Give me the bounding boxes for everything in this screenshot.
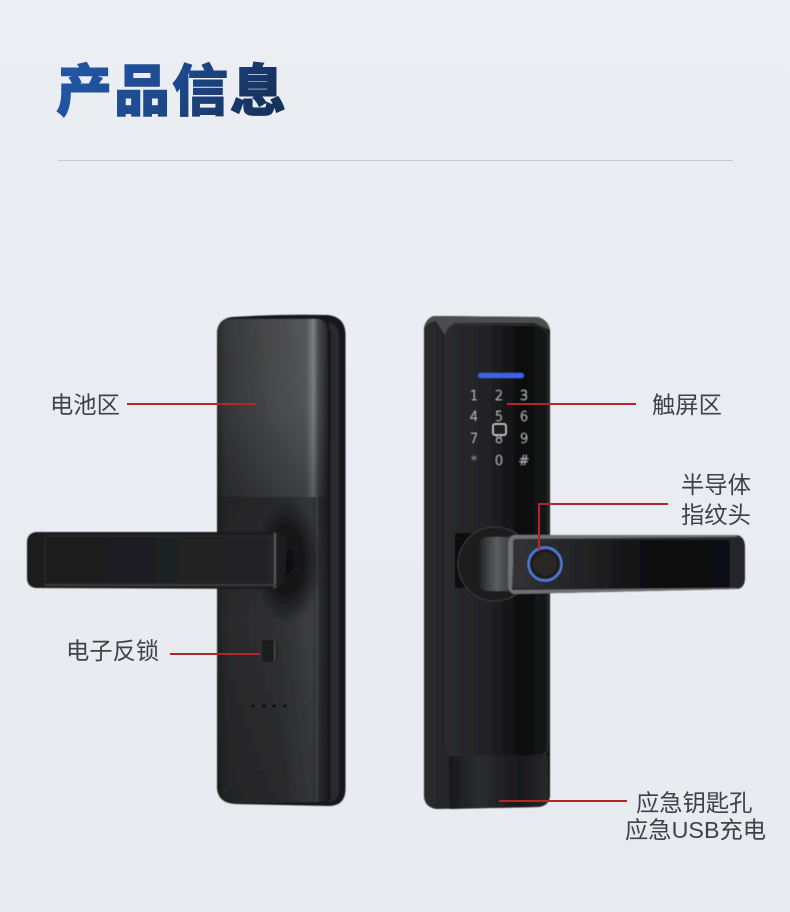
callout: fingerprint: 半导体: [681, 472, 751, 498]
callout: reverse lock: 电子反锁: [66, 638, 159, 664]
callout: emergency key and USB: 应急USB充电: [625, 817, 766, 843]
keypad: #: [519, 454, 529, 469]
title: 产品信息: [56, 47, 288, 128]
keypad: 5: [495, 410, 503, 425]
keypad: [470, 389, 529, 469]
thumb-turn slot: [262, 640, 277, 662]
callout: fingerprint: 指纹头: [681, 502, 751, 528]
callout: touch screen: 触屏区: [652, 392, 722, 418]
keypad: 8: [495, 432, 503, 447]
keypad: *: [471, 454, 477, 469]
callout: emergency key and USB: [499, 790, 766, 843]
knob: [479, 537, 519, 591]
fingerprint reader: [528, 548, 562, 580]
speaker dots: [252, 704, 286, 708]
lower plate: [217, 497, 328, 803]
keypad: 6: [520, 410, 528, 425]
keypad: 3: [520, 389, 528, 404]
keypad: 7: [470, 432, 478, 447]
card reader icon: [493, 424, 506, 435]
back plate body: [217, 315, 346, 806]
keypad: 2: [495, 389, 503, 404]
left lock: back view: [27, 315, 346, 806]
keypad: 4: [470, 410, 478, 425]
handle shadow: [254, 500, 322, 624]
keypad: 1: [470, 389, 478, 404]
keypad: 9: [520, 432, 528, 447]
keypad: 0: [495, 454, 503, 469]
callout: emergency key and USB: 应急钥匙孔: [636, 790, 752, 816]
battery compartment: [217, 319, 328, 497]
indicator light: [478, 373, 524, 378]
lever backplate: [455, 533, 513, 588]
callout: fingerprint: [539, 472, 751, 551]
right lock: front view: [424, 316, 745, 809]
callout: battery: 电池区: [50, 392, 120, 418]
knob collar: [458, 527, 532, 601]
outer frame: [424, 316, 550, 809]
rear lever handle: [27, 532, 287, 589]
front lever handle: [508, 535, 745, 594]
touch panel: [446, 325, 548, 756]
bottom cap: [449, 755, 549, 809]
